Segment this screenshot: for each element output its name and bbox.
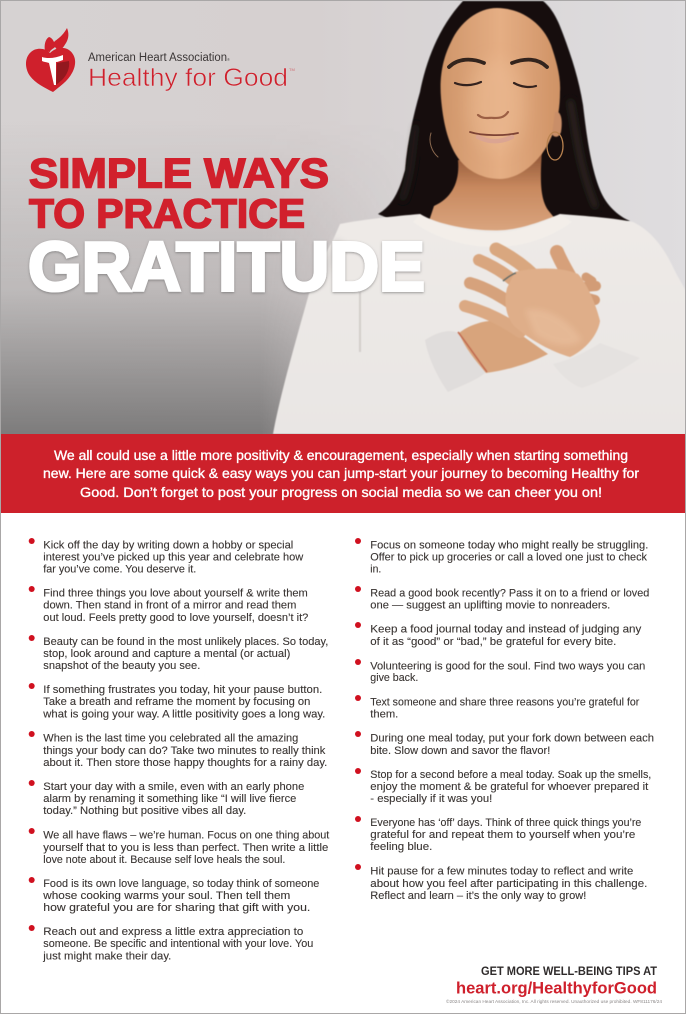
tip: good book: Read a good book recently? Pass it on to a friend or loved: [370, 588, 649, 600]
tip: good book: one — suggest an uplifting movie to nonreaders.: [370, 600, 610, 612]
tip: your body: things your body can do? Take two minutes to really think: [43, 745, 326, 757]
photo: sweater collar: [413, 214, 572, 247]
tip: appreciation: Reach out and express a little extra appreciation to: [43, 926, 303, 938]
tip: text someone: Text someone and share three reasons you’re grateful for: [370, 696, 639, 708]
panel: right column of tips: [355, 538, 654, 902]
tip: soak up smells: [355, 768, 651, 805]
tip: fork down: bite. Slow down and savor the flavor!: [370, 745, 550, 757]
photo: hair: [378, 1, 630, 232]
photo: crossed hands: [458, 249, 600, 373]
tip: good book: [355, 586, 649, 612]
tip: food love language: how grateful you are for sharing that gift with you.: [43, 902, 310, 914]
tip: flaws: [29, 828, 330, 866]
intro text: [43, 448, 639, 500]
tip: reflect: about how you feel after participating in this challenge.: [370, 878, 647, 890]
tip: off days: feeling blue.: [370, 841, 432, 853]
intro text: Good. Don’t forget to post your progress on social media so we can cheer you on!: [80, 485, 602, 500]
tip: reflect: Reflect and learn – it’s the only way to grow!: [370, 890, 586, 902]
tip: fork down: [355, 731, 654, 757]
tip: hobby: far you’ve come. You deserve it.: [43, 564, 196, 576]
tip: text someone: [355, 695, 639, 720]
tip: pause button: If something frustrates you today, hit your pause button.: [43, 684, 322, 696]
tip: beauty: [29, 635, 328, 672]
tip: volunteering: give back.: [370, 672, 418, 684]
tip: flaws: We all have flaws – we’re human. Focus on one thing about: [43, 830, 330, 842]
footer link: heart.org/HealthyforGood: [456, 980, 657, 998]
footer: call to action: [446, 966, 662, 1004]
tip: your body: When is the last time you celebrated all the amazing: [43, 732, 298, 744]
tip: beauty: snapshot of the beauty you see.: [43, 660, 200, 672]
logo text: Healthy for Good: Healthy for Good: [88, 64, 288, 92]
tip: appreciation: [29, 925, 313, 962]
title line: Gratitude: GRATITUDE: [28, 228, 425, 306]
icon: heart and torch: [26, 28, 75, 92]
tip: your body: about it. Then store those happy thoughts for a rainy day.: [43, 757, 327, 769]
tip: food love language: [29, 877, 319, 914]
tip: beauty: Beauty can be found in the most unlikely places. So today,: [43, 636, 328, 648]
photo: white sweater: [273, 214, 686, 434]
tip: your body: [29, 731, 327, 769]
tip: food journal: of it as “good” or “bad,” be grateful for every bite.: [370, 636, 616, 648]
copyright: ©2024 American Heart Association, Inc. All rights reserved. Unauthorized use prohibited. WF811176/24: [446, 998, 662, 1004]
panel: hero photo of woman with hands on heart: [0, 0, 686, 434]
title: [28, 150, 425, 306]
logo mark: registered: ®: [227, 57, 230, 62]
tip: soak up smells: enjoy the moment & be grateful for whoever prepared it: [370, 781, 649, 793]
title line: To Practice: TO PRACTICE: [29, 190, 305, 236]
tip: someone struggling: in.: [370, 564, 381, 576]
tip: food journal: [355, 622, 642, 648]
tip: someone struggling: [355, 538, 648, 576]
tip: smile: today.” Nothing but positive vibes all day.: [43, 805, 246, 817]
tip: food love language: whose cooking warms your soul. Then tell them: [42, 890, 290, 902]
tip: off days: [355, 816, 641, 853]
tip: food journal: Keep a food journal today and instead of judging any: [370, 624, 642, 636]
photo: sleeve folds and shading: [318, 240, 640, 392]
logo: American Heart Association Healthy for Good: [26, 28, 295, 92]
tip: smile: Start your day with a smile, even with an early phone: [43, 781, 304, 793]
tip: reflect: [355, 864, 647, 902]
tip: hobby: [29, 538, 304, 576]
tip: appreciation: someone. Be specific and intentional with your love. You: [43, 938, 313, 950]
panel: red intro banner: [0, 434, 686, 513]
photo: face: [441, 8, 562, 179]
tip: volunteering: [355, 659, 645, 684]
tip: off days: grateful for and repeat them to yourself when you’re: [370, 829, 635, 841]
logo mark: trademark: TM: [289, 67, 295, 72]
tip: three things: [29, 586, 308, 624]
tip: food love language: Food is its own love language, so today think of someone: [43, 878, 319, 890]
logo text: American Heart Association: American Heart Association: [88, 52, 227, 64]
tip: off days: Everyone has ‘off’ days. Think of three quick things you’re: [370, 817, 641, 829]
tip: soak up smells: - especially if it was you!: [370, 793, 492, 805]
tip: flaws: yourself that to you is less than perfect. Then write a little: [43, 842, 328, 854]
intro text: new. Here are some quick & easy ways you can jump-start your journey to becoming Healthy for: [43, 466, 639, 481]
intro text: We all could use a little more positivity & encouragement, especially when starting something: [54, 448, 628, 463]
tip: fork down: During one meal today, put your fork down between each: [370, 732, 654, 744]
tip: volunteering: Volunteering is good for the soul. Find two ways you can: [370, 660, 645, 672]
tip: pause button: [29, 683, 325, 720]
tip: someone struggling: Offer to pick up groceries or call a loved one just to check: [370, 552, 647, 564]
panel: left column of tips: [29, 538, 330, 962]
tip: hobby: interest you’ve picked up this year and celebrate how: [43, 552, 304, 564]
tip: text someone: them.: [370, 708, 398, 720]
tip: hobby: Kick off the day by writing down a hobby or special: [43, 540, 293, 552]
tip: smile: [29, 780, 304, 817]
tip: someone struggling: Focus on someone today who might really be struggling.: [370, 540, 648, 552]
tip: soak up smells: Stop for a second before a meal today. Soak up the smells,: [370, 769, 651, 781]
tip: smile: alarm by renaming it something like “I will live fierce: [43, 793, 296, 805]
photo: facial features: [430, 60, 563, 160]
tip: appreciation: just might make their day.: [42, 950, 171, 962]
tip: pause button: what is going your way. A little positivity goes a long way.: [42, 708, 325, 720]
tip: flaws: love note about it. Because self love heals the soul.: [43, 854, 285, 866]
photo: neck: [428, 150, 556, 234]
title line: Simple Ways: SIMPLE WAYS: [29, 150, 329, 196]
tip: three things: down. Then stand in front of a mirror and read them: [43, 600, 296, 612]
tip: pause button: Take a breath and reframe the moment by focusing on: [43, 696, 310, 708]
footer heading: GET MORE WELL-BEING TIPS AT: [481, 966, 657, 978]
tip: beauty: stop, look around and capture a mental (or actual): [43, 648, 290, 660]
tip: three things: Find three things you love about yourself & write them: [43, 588, 308, 600]
tip: three things: out loud. Feels pretty good to love yourself, doesn’t it?: [43, 612, 308, 624]
tip: reflect: Hit pause for a few minutes today to reflect and write: [370, 866, 633, 878]
